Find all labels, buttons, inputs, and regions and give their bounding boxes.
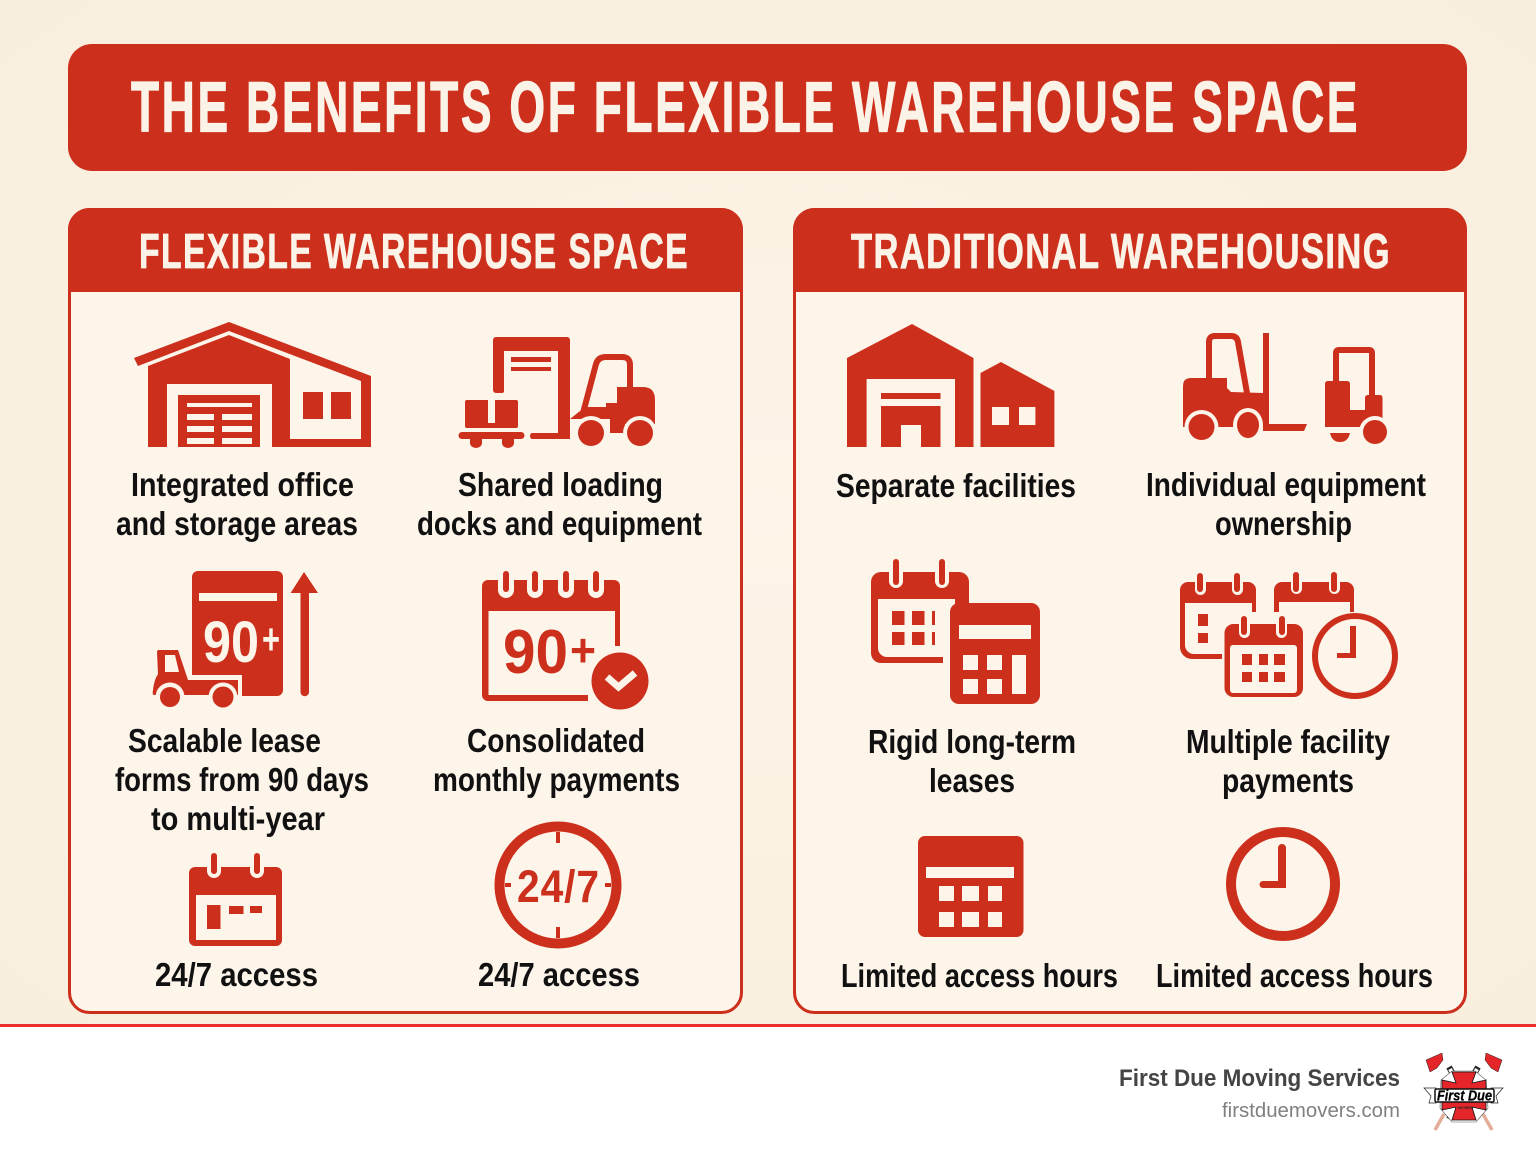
panel header: flexible: FLEXIBLE WAREHOUSE SPACE (139, 225, 689, 279)
logo: first due badge: MOVERS (1458, 1106, 1474, 1110)
icon: truck with 90+ lease and up arrow (150, 571, 318, 712)
panel header: traditional (793, 208, 1467, 292)
label: integrated office: and storage areas (116, 505, 358, 542)
label: integrated office: Integrated office (131, 466, 354, 503)
icon: multiple calendars and clock (1180, 570, 1395, 697)
label: scalable lease: to multi-year (151, 800, 325, 837)
label: individual equipment ownership: Individual equipment (1146, 466, 1426, 503)
label: multiple facility payments: payments (1222, 762, 1354, 799)
icon: separate facilities (847, 324, 1054, 447)
label: shared loading docks: Shared loading (458, 466, 663, 503)
icon: calendar and calculator (871, 557, 1040, 704)
label: limited access hours right: Limited access hours (1156, 957, 1433, 994)
logo: first due badge (1424, 1053, 1503, 1130)
icon: solid calendar (918, 836, 1024, 937)
icon: truck with 90+ lease and up arrow: + (262, 615, 280, 664)
icon: clock (1231, 832, 1335, 936)
logo: first due badge: First Due (1437, 1088, 1492, 1104)
icon: individual forklifts (1183, 333, 1391, 448)
label: separate facilities: Separate facilities (836, 467, 1076, 504)
label: shared loading docks: docks and equipment (417, 505, 702, 542)
panel: traditional warehousing (793, 208, 1467, 1012)
icon: shared loading dock and forklift (458, 337, 657, 450)
label: limited access hours left: Limited access hours (841, 957, 1118, 994)
icon: 24/7 clock: 24/7 (517, 861, 600, 912)
label: multiple facility payments (1186, 723, 1391, 799)
icon: calendar with 90+ and check (482, 570, 652, 713)
label: scalable lease: Scalable lease (128, 722, 321, 759)
label: 24/7 access right: 24/7 access (478, 956, 640, 993)
label: scalable lease: forms from 90 days (115, 761, 369, 798)
footer website: firstduemovers.com (1222, 1099, 1400, 1122)
label: individual equipment ownership: ownership (1215, 505, 1352, 542)
panel header: flexible (68, 208, 743, 292)
footer (0, 1024, 1536, 1154)
footer company name: First Due Moving Services (1119, 1065, 1400, 1092)
label: shared loading docks (417, 466, 702, 542)
label: rigid long-term leases: leases (929, 762, 1015, 799)
title banner (68, 44, 1467, 171)
icon: calendar with 90+ and check: 90 (503, 618, 568, 687)
label: scalable lease (115, 722, 369, 837)
icon: warehouse with integrated office (134, 322, 371, 447)
label: individual equipment ownership (1146, 466, 1426, 542)
icon: small calendar (189, 850, 282, 946)
panel: flexible warehouse space (68, 208, 743, 1012)
icon: truck with 90+ lease and up arrow: 90 (203, 610, 259, 675)
label: 24/7 access left: 24/7 access (155, 956, 318, 993)
icon: 24/7 clock (500, 826, 616, 944)
label: consolidated monthly payments (433, 722, 680, 798)
label: consolidated monthly payments: Consolidated (467, 722, 645, 759)
label: consolidated monthly payments: monthly payments (433, 761, 680, 798)
label: rigid long-term leases: Rigid long-term (868, 723, 1076, 760)
icon: calendar with 90+ and check: + (570, 624, 596, 676)
label: multiple facility payments: Multiple facility (1186, 723, 1391, 760)
label: integrated office (116, 466, 358, 542)
label: rigid long-term leases (868, 723, 1076, 799)
